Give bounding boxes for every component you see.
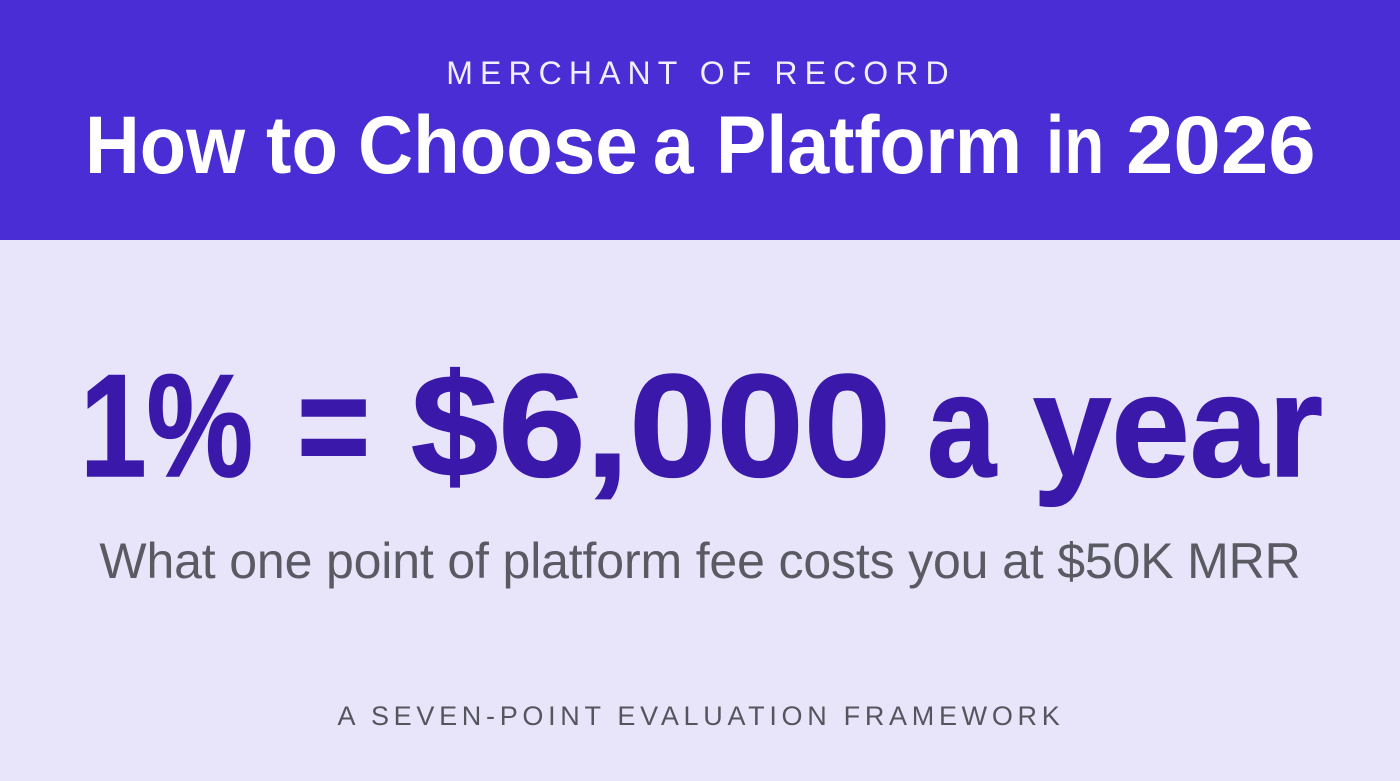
- stat caption: What one point of platform fee costs you at $50K MRR: [99, 533, 1301, 589]
- title: Platform: [716, 100, 1022, 191]
- headline stat: a: [927, 344, 996, 507]
- headline stat: [80, 344, 1323, 507]
- header band: [0, 0, 1400, 240]
- title: 2026: [1126, 100, 1316, 191]
- title: How: [85, 100, 245, 191]
- headline stat: =: [297, 344, 370, 507]
- title: [85, 100, 1316, 191]
- headline stat: $6,000: [411, 344, 891, 507]
- eyebrow label: MERCHANT OF RECORD: [446, 55, 956, 91]
- title: a: [653, 100, 694, 191]
- headline stat: year: [1033, 344, 1323, 507]
- headline stat: 1%: [80, 344, 253, 507]
- footer label: A SEVEN-POINT EVALUATION FRAMEWORK: [338, 701, 1064, 731]
- title: in: [1046, 100, 1104, 191]
- title: to: [266, 100, 338, 191]
- title: Choose: [358, 100, 638, 191]
